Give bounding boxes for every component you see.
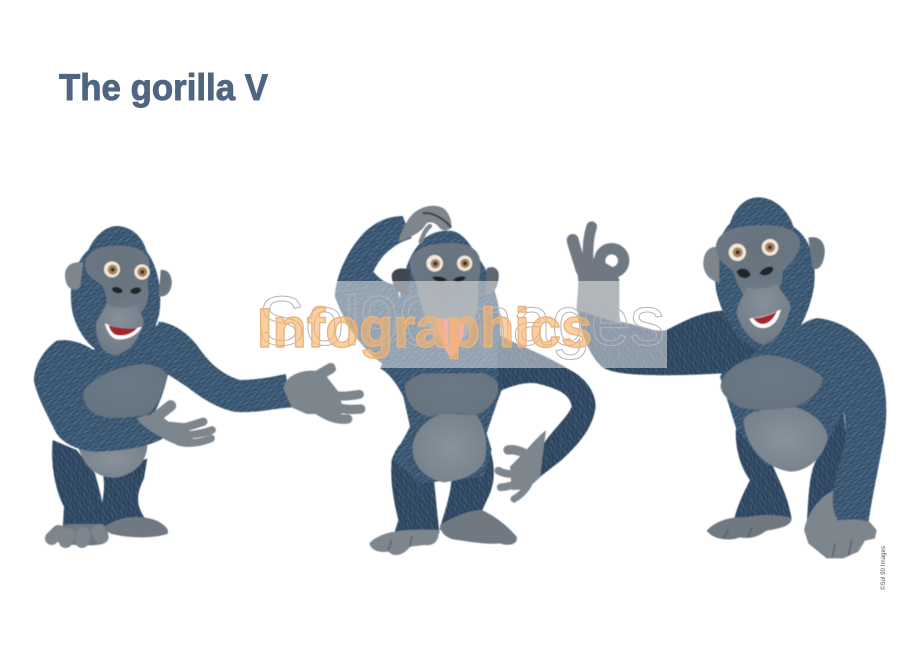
outstretched hand (283, 368, 361, 421)
chest (405, 368, 498, 417)
left leg (391, 440, 439, 537)
chest (83, 364, 167, 418)
hand on head (398, 206, 451, 242)
raised upper arm (577, 290, 760, 375)
face (410, 243, 480, 345)
right foot (105, 517, 168, 537)
right ear (485, 267, 499, 295)
torso fur (67, 322, 169, 427)
brow and nose (85, 246, 149, 313)
muzzle (737, 283, 791, 345)
left eye (729, 244, 746, 261)
near hand (137, 406, 212, 446)
illustration: gorilla scratching its head (335, 206, 596, 555)
right ear (159, 270, 172, 296)
right foot (440, 510, 517, 545)
left eye (426, 255, 443, 272)
tongue (437, 319, 465, 357)
left ear (703, 247, 719, 283)
watermark band (335, 281, 667, 368)
right leg (101, 458, 147, 530)
muzzle (96, 303, 144, 355)
illustration: gorilla presenting with both arms (34, 226, 361, 545)
right eye (762, 239, 778, 256)
right eye (457, 256, 472, 271)
ground hand (804, 491, 877, 558)
torso fur (380, 333, 503, 483)
title: The gorilla V (59, 67, 268, 108)
curved arm (497, 333, 596, 477)
nostrils (737, 267, 773, 278)
foot (707, 515, 792, 539)
credit: ©Sol 90 Images (880, 546, 887, 590)
nostrils (112, 287, 141, 294)
left ear (65, 262, 83, 290)
lower hand (498, 430, 546, 499)
belly (743, 407, 828, 472)
belly (413, 413, 486, 482)
brow and nose (716, 225, 800, 298)
outstretched arm (158, 322, 292, 412)
leg (734, 423, 792, 520)
left eye (104, 261, 120, 277)
torso fur (720, 323, 845, 467)
right leg (439, 452, 494, 530)
chest (721, 355, 823, 410)
OK hand (573, 227, 624, 323)
left foot (48, 524, 108, 545)
long arm (780, 318, 886, 523)
watermark: Sol90images outline: Sol90images (258, 282, 665, 360)
left leg (52, 440, 106, 530)
raised arm (335, 216, 417, 373)
head fur (398, 231, 501, 373)
back leg (807, 410, 848, 523)
mouth (749, 309, 781, 328)
right eye (134, 264, 150, 280)
left ear (392, 268, 410, 295)
head fur (715, 197, 815, 353)
belly (78, 442, 147, 478)
right ear (808, 237, 825, 269)
illustration: gorilla making OK sign (573, 197, 886, 558)
mouth (105, 323, 142, 339)
head fur (71, 226, 160, 357)
left foot (369, 530, 439, 555)
folded arm (34, 340, 165, 452)
nostrils (432, 276, 466, 282)
watermark: Infographics: Infographics (257, 296, 592, 359)
